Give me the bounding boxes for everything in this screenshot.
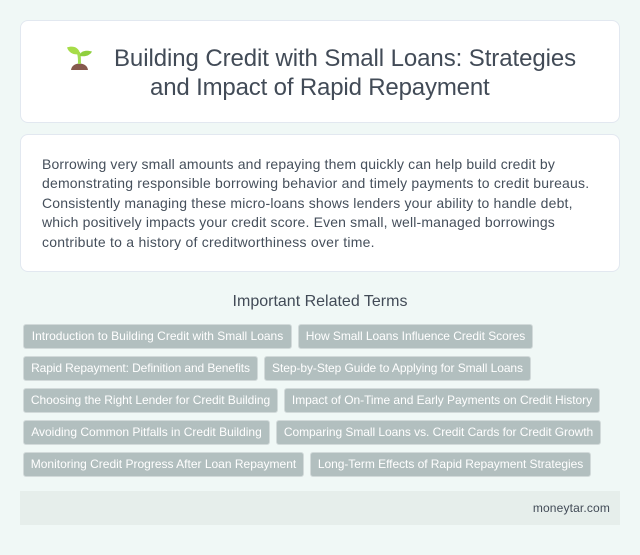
title line 2: and Impact of Rapid Repayment <box>150 74 490 101</box>
description text: which positively impacts your credit score. Even small, well-managed borrowings <box>42 214 555 230</box>
related terms tags: Rapid Repayment: Definition and Benefits <box>31 361 250 375</box>
icon: seedling <box>67 46 92 70</box>
related terms tags: Monitoring Credit Progress After Loan Repayment <box>31 457 296 471</box>
description text: Consistently managing these micro-loans shows lenders your ability to handle debt, <box>42 195 573 211</box>
heading: related terms: Important Related Terms <box>233 293 407 310</box>
related terms tags: Choosing the Right Lender for Credit Building <box>31 393 270 407</box>
description text: contribute to a history of creditworthiness over time. <box>42 234 375 250</box>
related terms tags: Long-Term Effects of Rapid Repayment Strategies <box>318 457 583 471</box>
related terms tags: Step-by-Step Guide to Applying for Small Loans <box>272 361 523 375</box>
footer bar <box>20 491 620 525</box>
related terms tags: Avoiding Common Pitfalls in Credit Building <box>31 425 262 439</box>
footer source: moneytar.com <box>533 501 610 515</box>
panel: title card <box>20 20 620 123</box>
title line 1: Building Credit with Small Loans: Strategies <box>114 45 576 72</box>
description text <box>42 156 589 250</box>
related terms tags <box>23 324 601 477</box>
description text: demonstrating responsible borrowing behavior and timely payments to credit bureaus. <box>42 175 589 191</box>
panel: description <box>20 134 620 272</box>
description text: Borrowing very small amounts and repaying them quickly can help build credit by <box>42 156 555 172</box>
related terms tags: How Small Loans Influence Credit Scores <box>306 329 525 343</box>
related terms tags: Introduction to Building Credit with Small Loans <box>32 329 283 343</box>
related terms tags: Impact of On-Time and Early Payments on Credit History <box>292 393 592 407</box>
related terms tags: Comparing Small Loans vs. Credit Cards for Credit Growth <box>284 425 593 439</box>
